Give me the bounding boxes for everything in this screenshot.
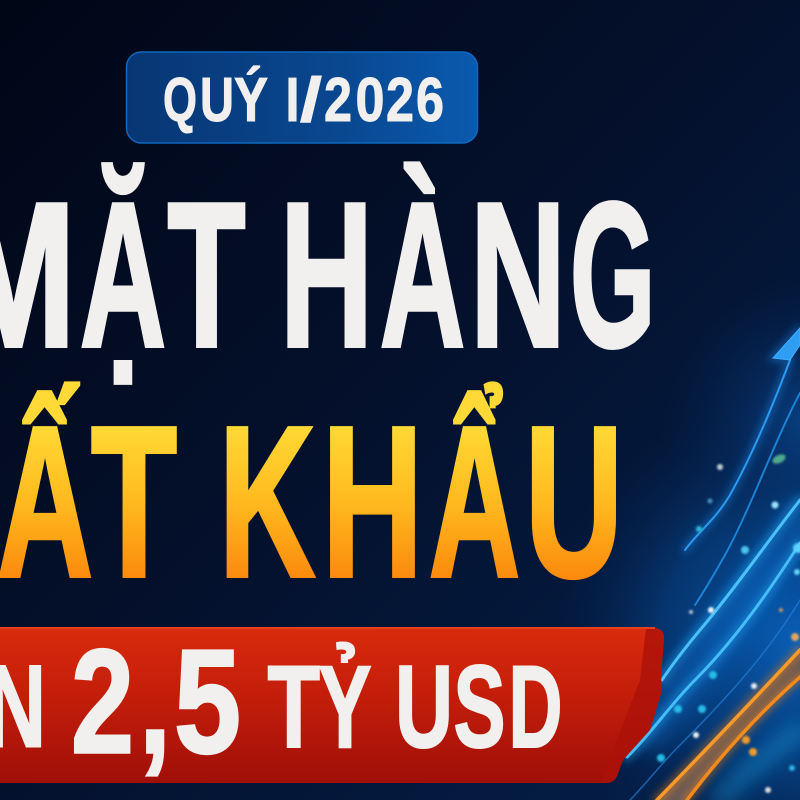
icon: glowing upward arrow: [685, 328, 800, 550]
title line 1: G: [570, 160, 656, 390]
unit: U: [395, 641, 453, 772]
unit: T: [268, 641, 320, 772]
value: 2: [71, 620, 134, 784]
title line 2: U: [525, 381, 623, 622]
title line 1: Ặ: [80, 160, 166, 390]
sparkle particles: [657, 452, 800, 793]
title line 1: H: [280, 160, 373, 390]
title line 1: T: [168, 160, 246, 390]
streak glow: [662, 500, 800, 680]
period badge: Ý: [234, 66, 268, 135]
rising light streaks with arrow: [627, 328, 800, 800]
streak glow: [627, 543, 800, 757]
red banner: [0, 628, 664, 783]
period badge: /: [300, 66, 322, 135]
period badge: [126, 52, 478, 143]
period badge: I: [286, 66, 300, 135]
period badge: 6: [416, 66, 444, 135]
lower corner glow: [720, 730, 800, 800]
banner text: [0, 620, 562, 784]
value: ,: [139, 620, 171, 784]
unit: D: [508, 641, 562, 772]
period badge: U: [200, 66, 234, 135]
value: 5: [174, 620, 241, 784]
period badge: 2: [324, 66, 352, 135]
title line 2: T: [91, 381, 177, 622]
title line 2: Ấ: [0, 381, 93, 622]
streak: [695, 393, 800, 605]
period badge: Q: [163, 66, 197, 135]
period badge: 2: [386, 66, 414, 135]
unit: Ỷ: [318, 641, 372, 772]
unit: S: [454, 641, 506, 772]
streak: [627, 543, 800, 757]
title line 1: N: [470, 160, 566, 390]
period badge: 0: [356, 66, 384, 135]
streak: [662, 500, 800, 680]
title line 1: À: [380, 160, 465, 390]
faint streak: [630, 600, 800, 800]
wide blue glow: [650, 520, 800, 730]
title line 2: H: [322, 381, 423, 622]
title line 2: Ẩ: [429, 381, 520, 622]
orange band: [657, 650, 800, 800]
title line 2: K: [219, 381, 315, 622]
